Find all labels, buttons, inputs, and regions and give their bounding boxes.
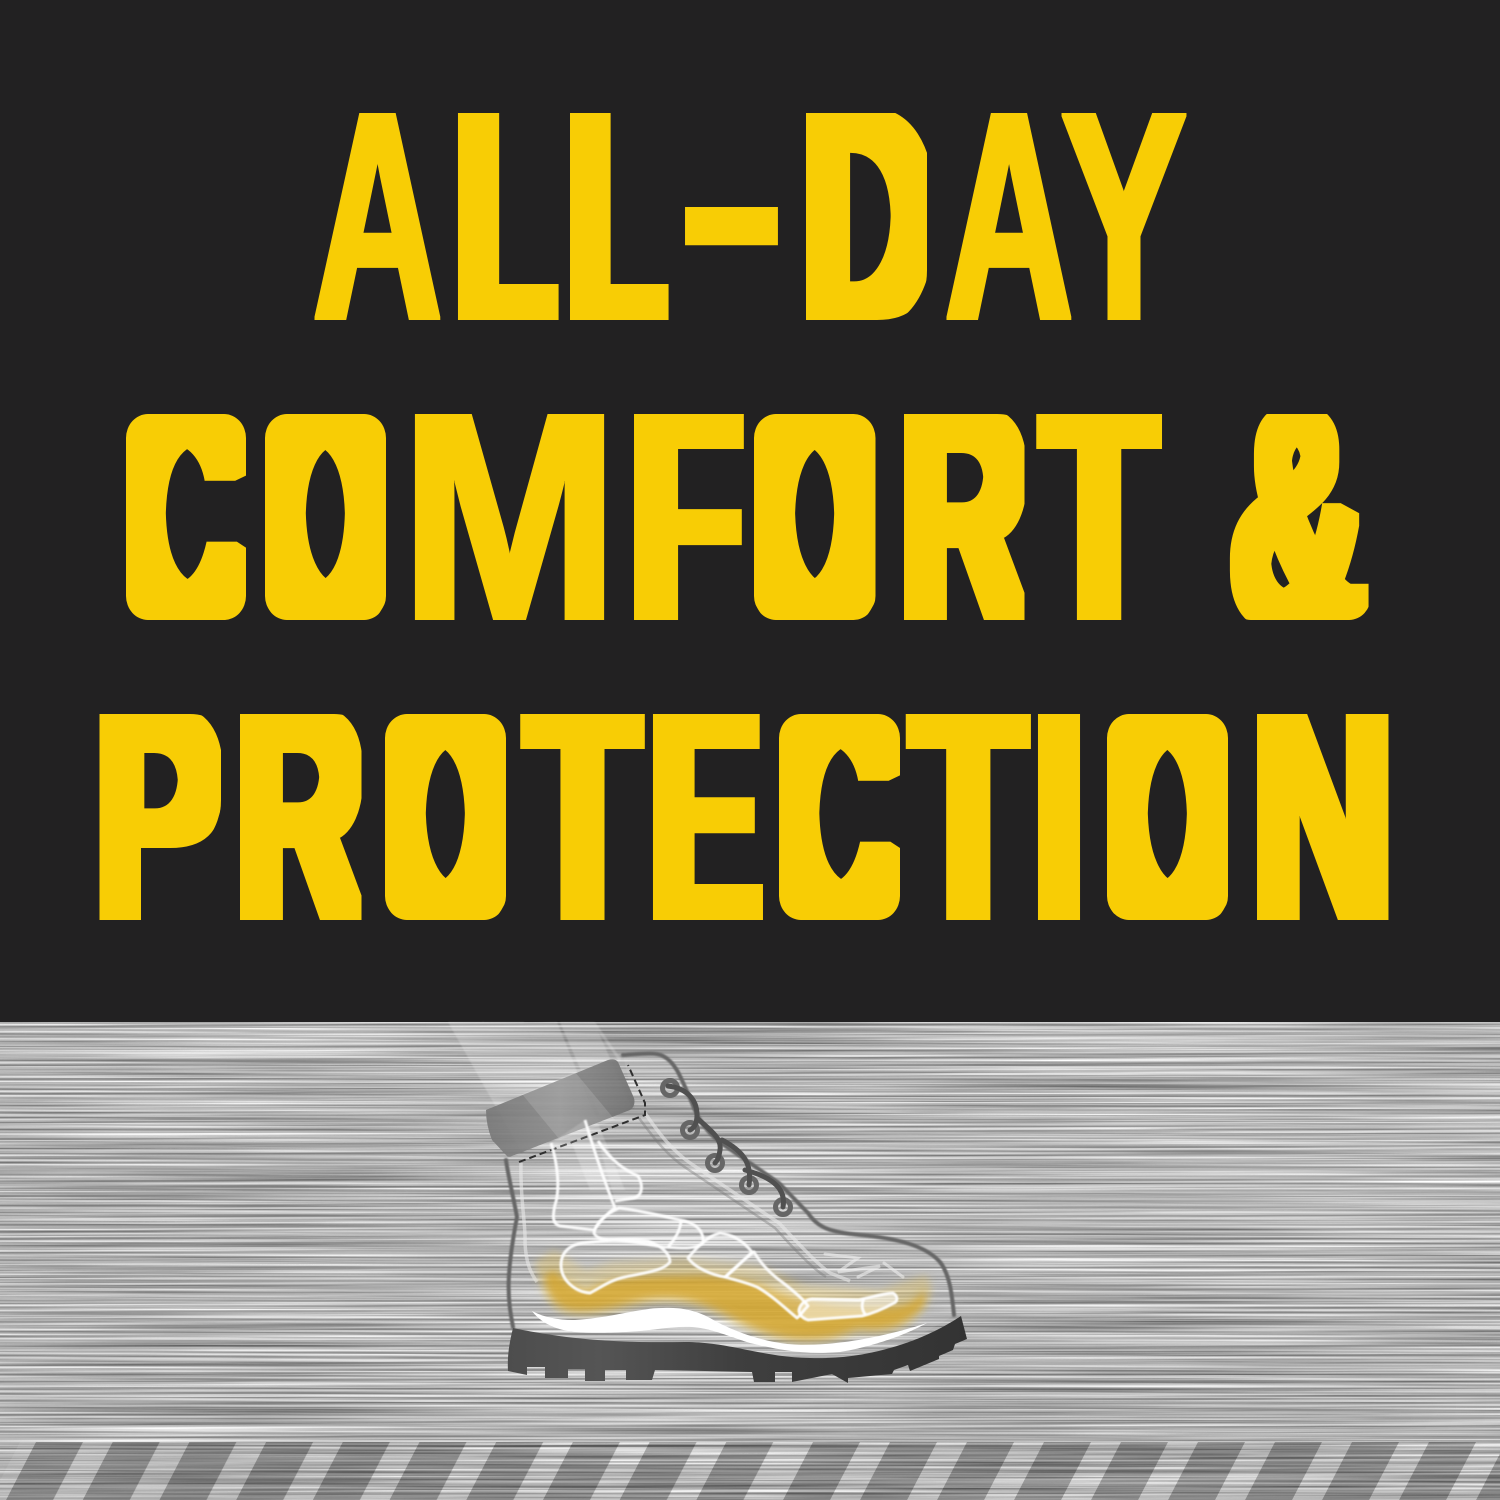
toe scribble [825,1254,903,1277]
boot glass body [506,1055,954,1358]
headline straight letters: E [651,650,760,982]
foot bones [551,1120,897,1320]
headline rounded letters: O [259,333,392,694]
collar bright leg overlap [522,1072,615,1140]
fibula [598,1141,641,1201]
headline straight letters: N [1253,652,1392,983]
headline rounded letters: C [770,633,903,994]
leg streaks [448,1022,632,1190]
boot outline [506,1054,954,1327]
headline straight letters: T [913,651,1024,982]
headline rounded letters: P [96,649,220,986]
headline straight letters: Y [1061,50,1187,382]
soft footbed halo [535,1250,932,1344]
cuneiform [688,1233,752,1277]
headline rounded letters: C [116,333,250,694]
headline rounded letters: O [379,633,512,994]
talus [594,1208,703,1248]
headline rounded letters [100,113,1369,920]
lugged outsole [508,1316,967,1383]
headline straight letters: L [568,51,664,382]
icon: transparent boot with foot skeleton [448,1022,967,1383]
hazard stripes [0,1442,1500,1500]
headline rounded letters: O [748,333,882,694]
navicular joint [668,1221,681,1247]
tibia [551,1120,615,1230]
headline straight letters: F [631,352,741,682]
headline straight letters: L [456,50,555,382]
toe joint [862,1298,866,1315]
headline straight letters: T [527,652,638,982]
headline rounded letters: & [1231,349,1365,686]
orange footbed [545,1270,925,1338]
toe bones [799,1293,897,1320]
headline rounded letters: D [803,48,934,385]
eyelets [662,1080,790,1214]
headline straight letters: M [400,351,619,682]
headline straight letters [314,113,1388,920]
metatarsal [725,1252,808,1318]
dark header panel [0,0,1500,1022]
white insole [532,1308,927,1353]
headline rounded letters: R [901,349,1027,686]
laces [668,1086,783,1207]
title: All-Day Comfort & Protection [100,113,1388,920]
stitched collar line [519,1065,645,1162]
headline straight letters: I [1036,650,1082,981]
calcaneus [561,1240,670,1293]
padded collar [486,1059,634,1157]
liner and tongue lines [521,1113,850,1282]
headline rounded letters: R [237,649,363,986]
headline straight letters: - [682,34,781,366]
headline rounded letters: O [1101,633,1234,994]
headline straight letters: A [313,50,442,381]
headline straight letters: T [1043,351,1155,682]
headline straight letters: A [945,50,1073,382]
panel: brushed metal floor [0,1022,1500,1500]
